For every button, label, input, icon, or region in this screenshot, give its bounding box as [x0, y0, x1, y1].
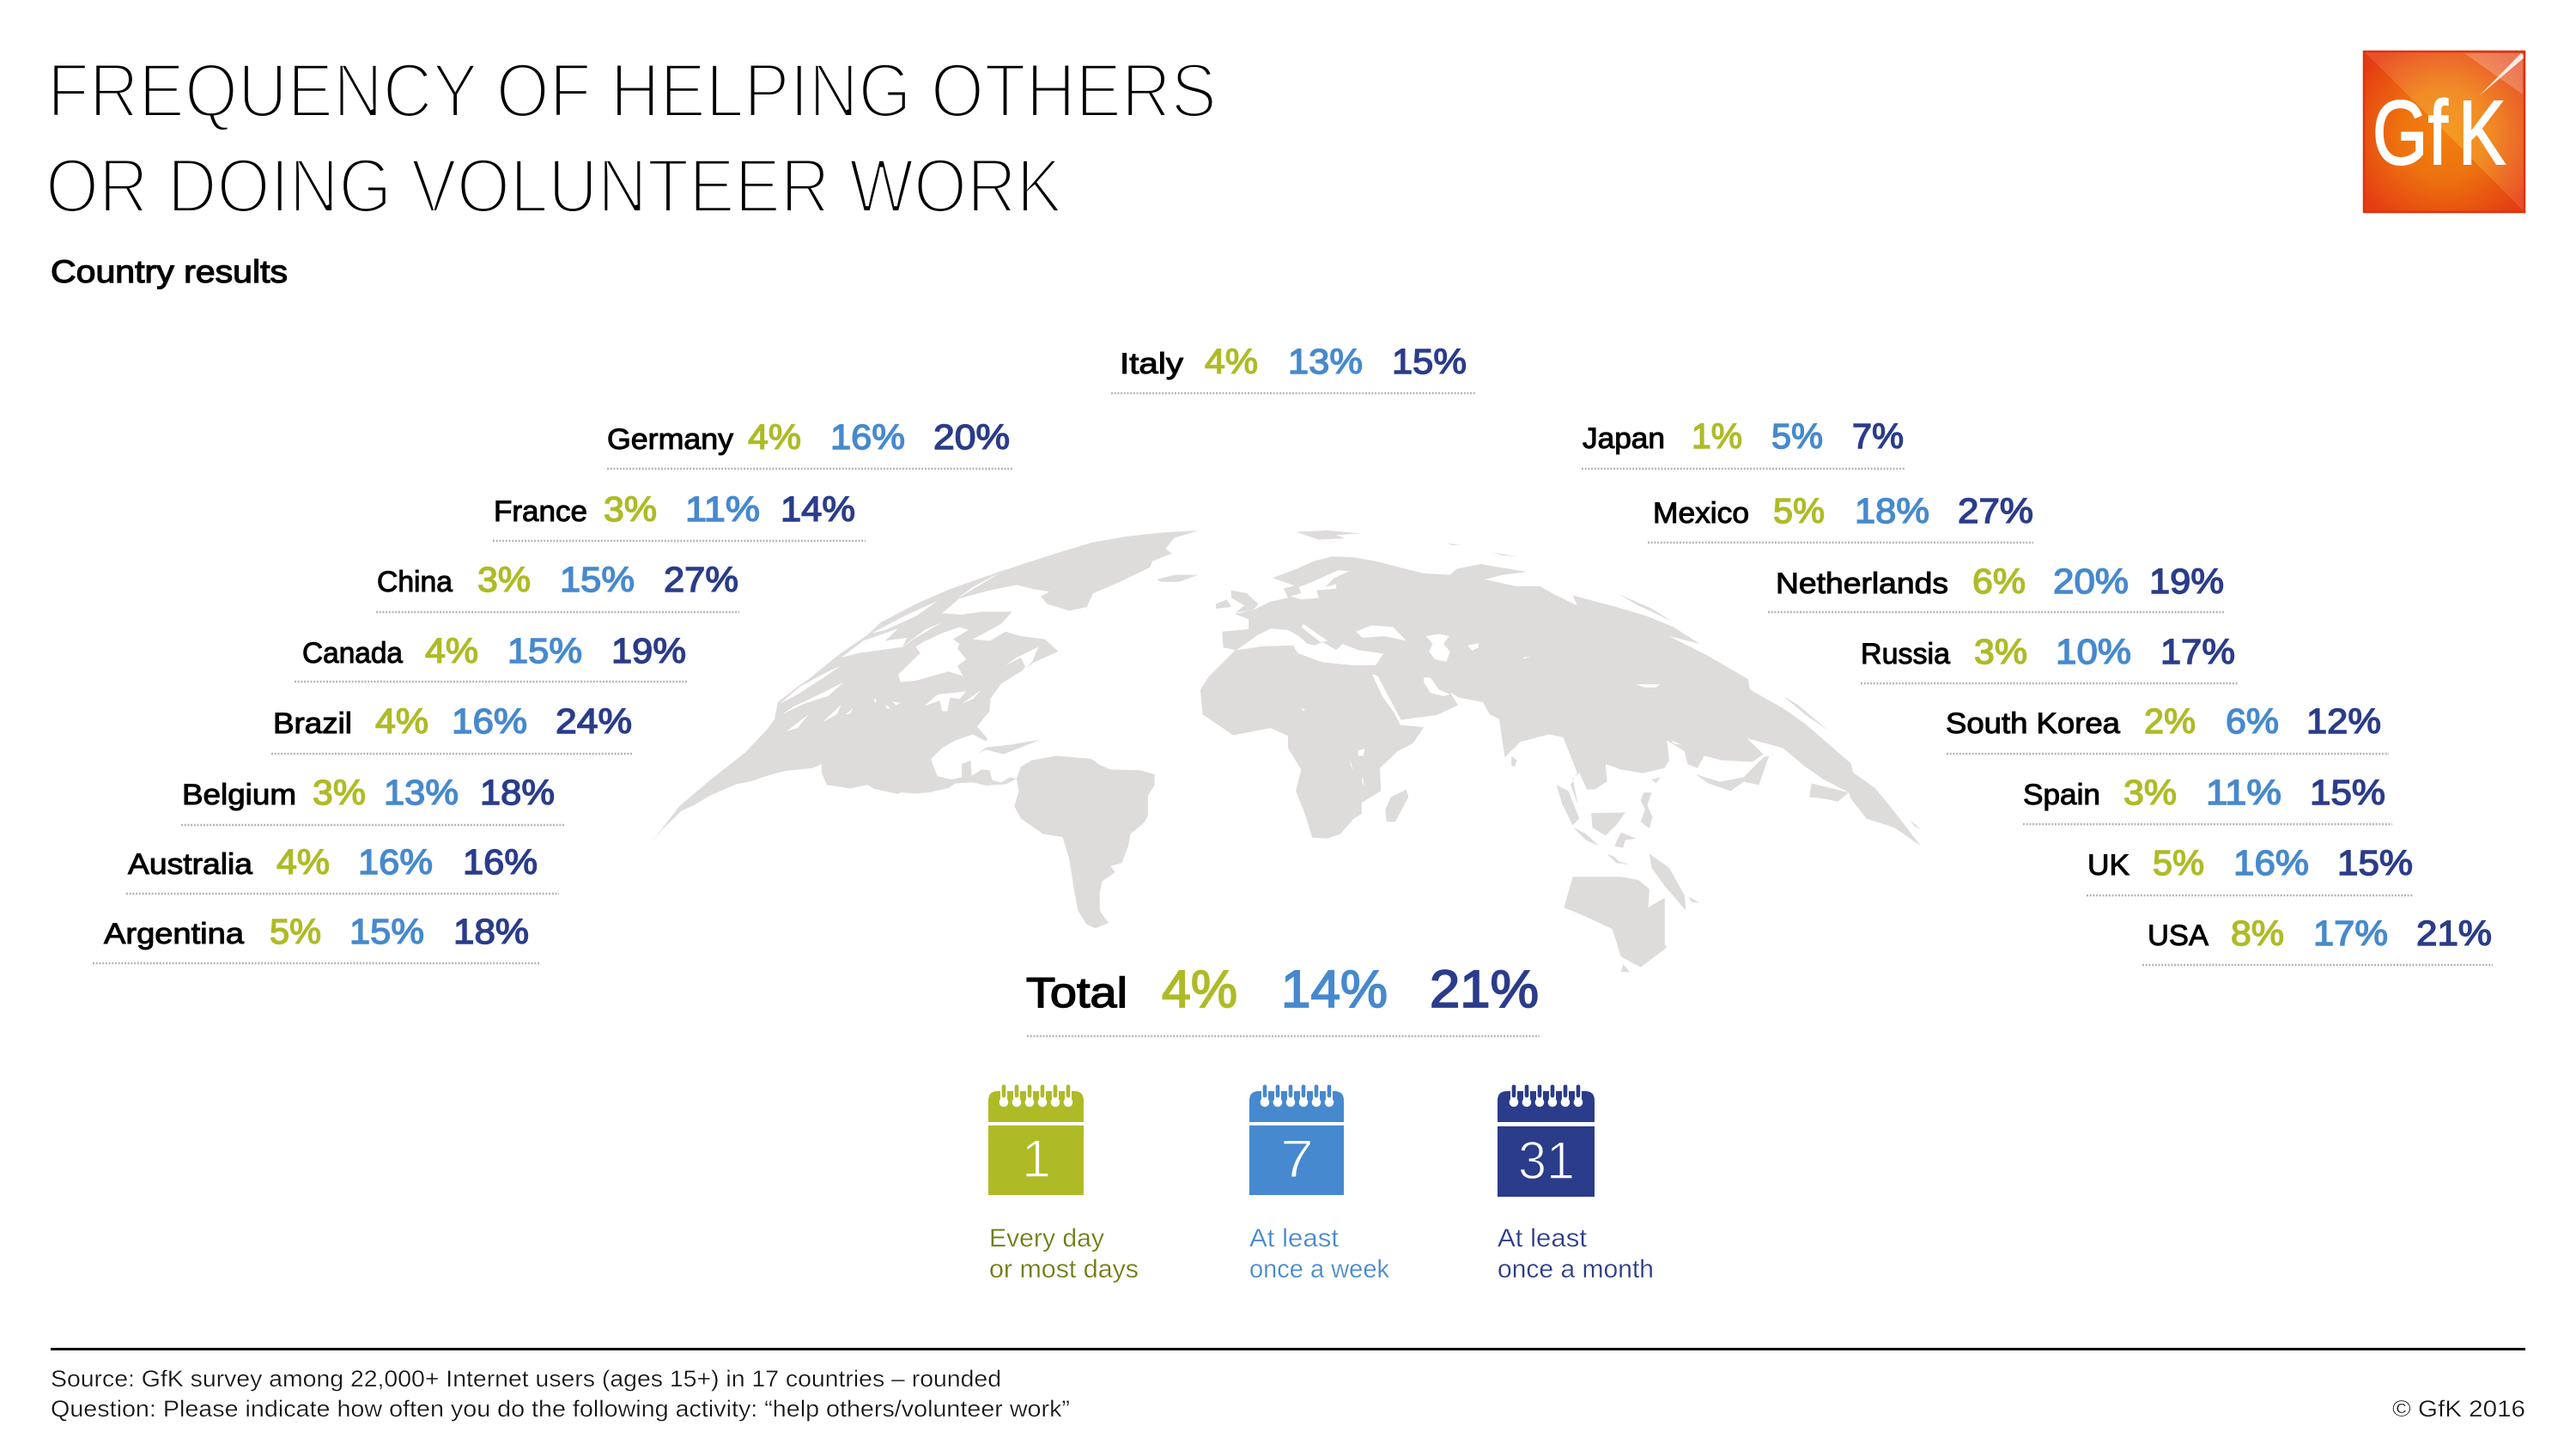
panel: right column of countries [1582, 416, 2493, 965]
icon: navy calendar [1498, 1085, 1595, 1197]
row: China: 15% [560, 560, 635, 599]
caption: once a month: once a month [1498, 1255, 1654, 1283]
row: Germany: 4% [748, 417, 801, 457]
row: China [376, 560, 739, 612]
footer rule [51, 1348, 2525, 1350]
row: Spain [2023, 773, 2392, 824]
row: USA: 8% [2231, 913, 2284, 953]
row: Brazil: 16% [452, 701, 527, 741]
caption: once a week: once a week [1249, 1255, 1390, 1283]
row: Canada: 4% [425, 631, 478, 670]
row: Brazil: 4% [375, 701, 428, 741]
row: Brazil: Brazil [273, 707, 352, 740]
caption: once a week: At least [1249, 1224, 1340, 1253]
row: Australia: 16% [358, 842, 433, 882]
row: South Korea: 6% [2226, 701, 2279, 741]
row: Italy: 15% [1392, 342, 1467, 381]
row: Australia [126, 842, 559, 894]
row: Netherlands: 19% [2149, 561, 2224, 601]
row: Argentina: 5% [270, 912, 321, 951]
row: France: 3% [604, 489, 657, 529]
row: Netherlands: 6% [1972, 561, 2026, 601]
row: Spain: 3% [2123, 773, 2177, 812]
row: Canada [295, 631, 687, 682]
row: Mexico: Mexico [1653, 497, 1749, 530]
icon: green calendar: 1 [1022, 1130, 1051, 1189]
row: China: 27% [664, 560, 738, 599]
title [46, 47, 1217, 228]
row: Italy [1111, 342, 1475, 393]
total row [1026, 960, 1540, 1036]
row: China: 3% [477, 560, 531, 599]
map: Eurasia, Africa, Asia-Pacific and Australia [1200, 531, 1921, 972]
legend: at least once a month [1498, 1085, 1654, 1283]
row: Germany: Germany [607, 423, 733, 456]
row: France: 11% [685, 489, 760, 529]
row: Japan: 5% [1771, 416, 1823, 456]
logo: GfK [2363, 51, 2525, 213]
total row: 14% [1281, 960, 1388, 1018]
row: South Korea: South Korea [1946, 707, 2120, 740]
row: Italy: 4% [1205, 342, 1258, 381]
row: Belgium: 3% [313, 773, 366, 812]
title: FREQUENCY OF HELPING OTHERS [47, 47, 1217, 133]
row: UK: 15% [2337, 843, 2413, 883]
subtitle: Country results: Country results [51, 254, 288, 289]
row: Netherlands: Netherlands [1776, 567, 1948, 600]
legend: at least once a week [1249, 1085, 1390, 1283]
row: Japan [1582, 416, 1905, 469]
row: Netherlands: 20% [2053, 561, 2129, 601]
row: Mexico: 5% [1773, 491, 1825, 531]
row: USA: 21% [2416, 913, 2492, 953]
row: South Korea: 12% [2306, 701, 2381, 741]
row: Russia: 17% [2160, 632, 2235, 671]
caption: every day: Every day [989, 1224, 1104, 1253]
legend: every day or most days [988, 1085, 1139, 1283]
panel: top centre row [1111, 342, 1475, 393]
row: Argentina: Argentina [104, 918, 244, 950]
row: Canada: 15% [507, 631, 582, 670]
row: Mexico: 27% [1958, 491, 2033, 531]
row: Japan: 7% [1852, 416, 1904, 456]
row: Russia: 3% [1974, 632, 2027, 671]
row: Russia: Russia [1861, 638, 1950, 670]
row: France: France [494, 495, 587, 528]
total row: Total [1026, 970, 1127, 1016]
row: USA: USA [2148, 919, 2208, 952]
row: Canada: Canada [302, 637, 403, 670]
row: Brazil [271, 701, 632, 754]
icon: blue calendar: 7 [1280, 1130, 1314, 1189]
logo: GfK: GfK [2372, 82, 2506, 184]
icon: blue calendar [1249, 1085, 1344, 1195]
row: Australia: 16% [463, 842, 538, 882]
total row: 21% [1430, 960, 1539, 1018]
icon: navy calendar: 31 [1518, 1131, 1575, 1191]
row: South Korea [1946, 701, 2389, 754]
row: Belgium: 13% [384, 773, 459, 812]
caption: every day [989, 1224, 1139, 1283]
row: USA: 17% [2313, 913, 2388, 953]
row: Netherlands [1768, 561, 2224, 612]
row: Australia: Australia [128, 848, 252, 881]
row: Italy: Italy [1120, 348, 1183, 380]
source note: Source: GfK survey among 22,000+ Internet users (ages 15+) in 17 countries – rounded [51, 1366, 1001, 1392]
row: Russia [1861, 632, 2239, 683]
world map [653, 531, 1921, 972]
row: UK: UK [2087, 849, 2129, 882]
row: France [493, 489, 866, 541]
row: China: China [377, 566, 453, 598]
row: South Korea: 2% [2144, 701, 2196, 741]
row: Canada: 19% [611, 631, 686, 670]
total row: 4% [1162, 960, 1237, 1018]
row: Brazil: 24% [556, 701, 632, 741]
row: Germany: 20% [933, 417, 1010, 457]
title: OR DOING VOLUNTEER WORK [46, 143, 1062, 228]
source note: Question: Please indicate how often you do the following activity: “help others/volunteer work” [51, 1396, 1070, 1422]
map: Americas, Greenland and Atlantic islands [653, 531, 1259, 928]
row: UK: 16% [2233, 843, 2309, 883]
row: Australia: 4% [276, 842, 330, 882]
row: UK [2087, 843, 2414, 895]
row: Russia: 10% [2056, 632, 2131, 671]
caption: once a week [1249, 1224, 1390, 1283]
row: Argentina: 18% [453, 912, 529, 951]
row: Germany [607, 417, 1013, 469]
icon: green calendar [988, 1085, 1084, 1195]
row: Spain: Spain [2023, 779, 2100, 811]
row: UK: 5% [2153, 843, 2204, 883]
row: Japan: Japan [1583, 422, 1665, 455]
source note [51, 1366, 1070, 1422]
row: Germany: 16% [830, 417, 905, 457]
caption: once a month [1498, 1224, 1654, 1283]
row: Spain: 11% [2206, 773, 2281, 812]
caption: every day: or most days [989, 1255, 1139, 1283]
row: Argentina: 15% [349, 912, 424, 951]
row: Belgium [181, 773, 564, 825]
row: Mexico [1648, 491, 2033, 543]
row: Argentina [93, 912, 540, 963]
row: Spain: 15% [2310, 773, 2385, 812]
row: Japan: 1% [1692, 416, 1742, 456]
row: Mexico: 18% [1855, 491, 1929, 531]
caption: once a month: At least [1498, 1224, 1588, 1253]
row: Italy: 13% [1288, 342, 1363, 381]
row: Belgium: Belgium [182, 779, 296, 811]
row: France: 14% [781, 489, 855, 529]
row: Belgium: 18% [480, 773, 555, 812]
row: USA [2142, 913, 2493, 965]
copyright: © GfK 2016 [2392, 1396, 2525, 1422]
panel: left column of countries [93, 417, 1013, 963]
